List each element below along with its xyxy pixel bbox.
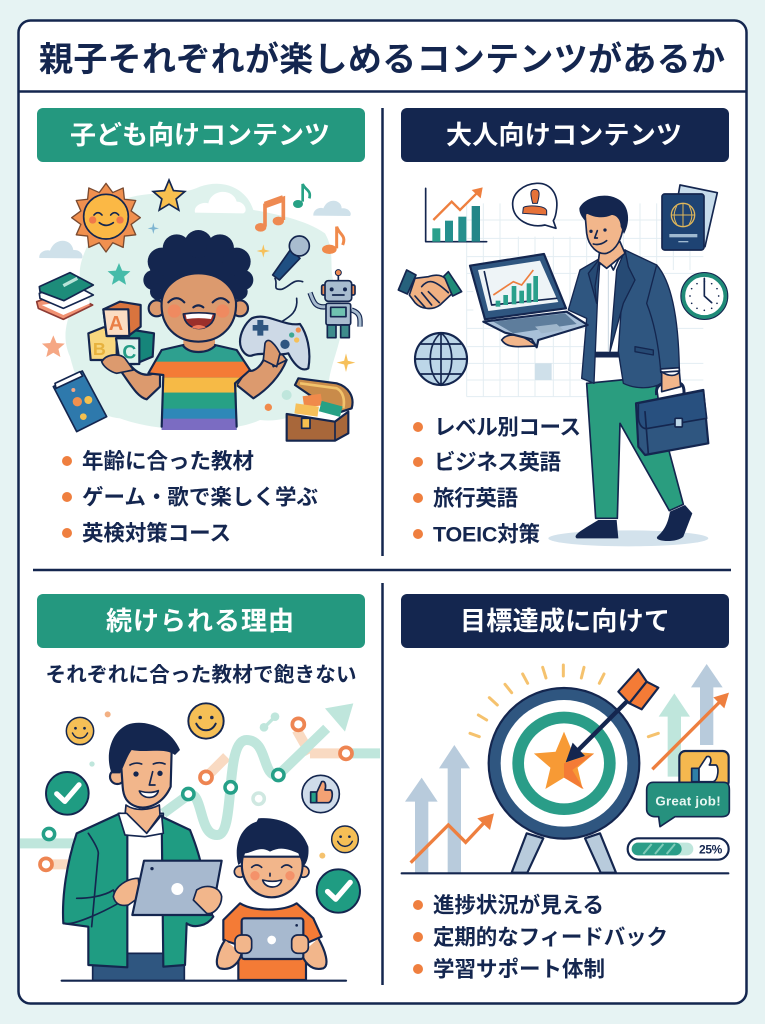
icon: clock (681, 273, 728, 319)
icon: alphabet blocks: C (122, 342, 136, 363)
illustration: parent and child with tablets (20, 703, 380, 981)
heading: children's content: 子ども向けコンテンツ (70, 120, 330, 150)
illustration: businessman (398, 183, 728, 546)
child figure (217, 818, 326, 980)
target (489, 688, 639, 839)
title: 親子それぞれが楽しめるコンテンツがあるか (39, 40, 725, 79)
icon: growth chart (426, 187, 487, 242)
neck (183, 337, 215, 352)
subtitle: それぞれに合った教材で飽きない (46, 664, 356, 686)
icon: music notes (255, 184, 344, 254)
illustration: happy child with toys (37, 180, 360, 441)
icon: passport (662, 185, 717, 250)
list: reaching goals: 定期的なフィードバック (433, 926, 668, 950)
shadow (548, 530, 708, 546)
star bullseye (534, 732, 594, 789)
title rule (19, 90, 746, 93)
ground line (62, 977, 346, 984)
icon: thumbs up (302, 775, 339, 813)
icon: sun (72, 183, 140, 252)
icon: alphabet blocks: A (109, 313, 123, 335)
icon: handshake (398, 270, 462, 308)
father head (109, 723, 180, 837)
speech bubble: Great job! (647, 782, 729, 827)
icons: check marks (46, 772, 360, 913)
panel: reasons to continue (20, 594, 380, 981)
trend arrows (411, 693, 729, 863)
list: children's content (62, 450, 318, 546)
milestones (40, 711, 352, 870)
laptop (470, 254, 588, 347)
shirt (594, 250, 625, 357)
hair (143, 230, 253, 310)
icon: globe (415, 333, 467, 385)
list: reaching goals: 学習サポート体制 (433, 958, 605, 982)
icon: alphabet blocks: B (93, 339, 106, 359)
head (579, 196, 628, 268)
list: children's content: ゲーム・歌で楽しく学ぶ (82, 486, 318, 510)
target stand (512, 833, 616, 873)
heading: reasons to continue (37, 594, 365, 648)
dividers (33, 108, 731, 985)
icon: stars and sparkles (42, 180, 355, 372)
list: adult content: 旅行英語 (433, 486, 518, 510)
progress bar: 25% (699, 842, 723, 856)
heading: reaching goals: 目標達成に向けて (460, 606, 670, 636)
icons: smiley faces (66, 703, 358, 853)
speech bubble: Great job!: Great job! (655, 793, 721, 808)
panel: reaching goals (401, 594, 729, 982)
heading: adult content: 大人向けコンテンツ (446, 120, 682, 150)
list: adult content: レベル別コース (434, 416, 581, 440)
rainbow shirt (147, 345, 253, 432)
list: reaching goals (413, 892, 668, 982)
father's tablet (113, 861, 222, 915)
heading: adult content (401, 108, 729, 162)
icon: robot (310, 270, 360, 338)
list: reaching goals: 進捗状況が見える (433, 892, 604, 918)
heading: children's content (37, 108, 365, 162)
heading: reaching goals (401, 594, 729, 648)
list: adult content: TOEIC対策 (433, 522, 540, 546)
icon: treasure chest (265, 378, 353, 441)
icon: stamp speech bubble (513, 183, 557, 228)
jacket (568, 250, 679, 388)
ground line (402, 870, 728, 877)
father figure (63, 723, 222, 981)
shoes (576, 505, 692, 541)
list: children's content: 年齢に合った教材 (82, 450, 254, 474)
badge: thumbs up (679, 751, 729, 788)
icon: microphone (273, 236, 309, 289)
progress bar (628, 838, 729, 860)
icon: stack of books (37, 273, 93, 319)
heading: reasons to continue: 続けられる理由 (106, 606, 294, 636)
arrow in target (566, 669, 658, 762)
child character (102, 230, 287, 432)
winding progress path (20, 703, 380, 864)
briefcase (636, 372, 708, 455)
arms (102, 342, 287, 399)
illustration: target and progress (402, 664, 729, 873)
icon: picture book (53, 371, 107, 432)
face (149, 273, 248, 342)
panel: children's content (37, 108, 365, 546)
clouds (39, 192, 351, 258)
hand (502, 335, 537, 347)
rising arrows (405, 664, 723, 873)
sparkle rays (470, 665, 658, 737)
icon: alphabet blocks (88, 302, 154, 364)
man figure (470, 196, 708, 541)
list: adult content: ビジネス英語 (434, 450, 561, 474)
trousers (587, 377, 683, 518)
panel: adult content (398, 108, 729, 546)
icon: game controller (240, 298, 309, 369)
list: children's content: 英検対策コース (82, 522, 231, 546)
list: adult content (413, 416, 581, 546)
